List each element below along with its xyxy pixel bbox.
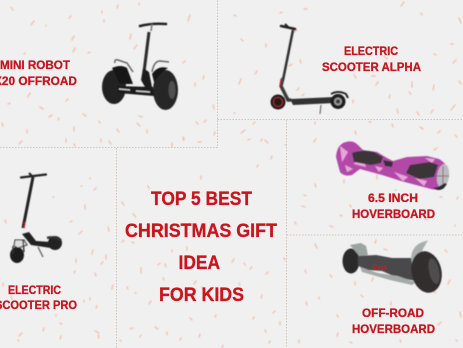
label: electric scooter pro bbox=[0, 283, 77, 312]
title: IDEA bbox=[178, 252, 220, 274]
icon: purple hoverboard bbox=[336, 141, 451, 190]
label: off-road hoverboard: OFF-ROAD bbox=[362, 306, 424, 320]
panel: off-road hoverboard bbox=[342, 240, 446, 336]
icon: off-road hoverboard bbox=[342, 240, 446, 296]
title: FOR KIDS bbox=[159, 284, 244, 306]
title: CHRISTMAS GIFT bbox=[125, 220, 277, 242]
icon: electric scooter pro bbox=[10, 173, 62, 263]
title bbox=[125, 188, 277, 306]
panel: mini robot x20 offroad bbox=[0, 24, 178, 110]
panel: 6.5 inch hoverboard bbox=[336, 141, 451, 221]
label: electric scooter pro: ELECTRIC bbox=[8, 283, 61, 297]
panel: electric scooter pro bbox=[0, 173, 77, 312]
label: electric scooter alpha: ELECTRIC bbox=[344, 44, 398, 58]
label: mini robot bbox=[0, 58, 77, 88]
label: 6.5 inch hoverboard: 6.5 INCH bbox=[368, 191, 418, 205]
panel: electric scooter alpha bbox=[270, 24, 421, 114]
label: 6.5 inch hoverboard bbox=[352, 191, 435, 221]
label: electric scooter alpha: SCOOTER ALPHA bbox=[322, 60, 421, 74]
label: 6.5 inch hoverboard: HOVERBOARD bbox=[352, 207, 435, 221]
title: TOP 5 BEST bbox=[151, 188, 252, 210]
label: mini robot: MINI ROBOT bbox=[0, 58, 71, 72]
label: off-road hoverboard bbox=[352, 306, 435, 336]
label: electric scooter alpha bbox=[322, 44, 421, 74]
label: off-road hoverboard: HOVERBOARD bbox=[352, 322, 435, 336]
icon: self-balancing scooter bbox=[102, 24, 178, 110]
icon: electric scooter alpha bbox=[270, 24, 348, 114]
